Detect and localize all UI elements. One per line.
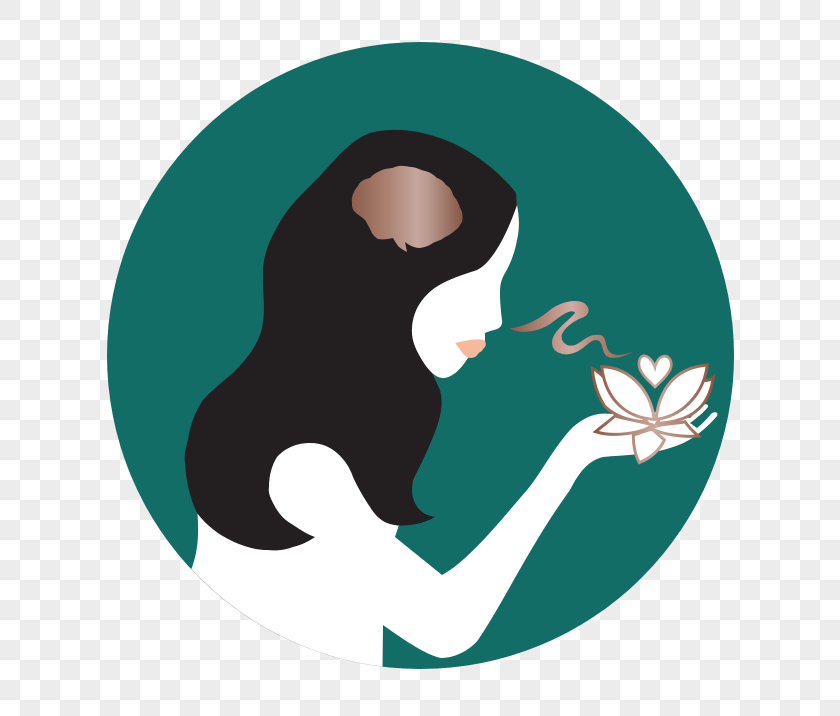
face <box>412 205 519 378</box>
back right petal <box>657 377 713 423</box>
brain <box>352 166 463 252</box>
bottom center petal <box>633 429 664 463</box>
heart <box>639 356 671 387</box>
left main petal <box>602 367 654 419</box>
arc edge <box>191 569 382 667</box>
teal circle background <box>107 42 734 669</box>
back left petal <box>592 368 647 422</box>
hair <box>185 130 517 550</box>
lotus flower with heart <box>592 356 713 463</box>
lips <box>455 339 486 358</box>
woman's body and arm <box>191 404 718 667</box>
bottom left petal <box>596 416 653 434</box>
bottom right petal <box>651 422 698 436</box>
scent swirl <box>509 301 633 358</box>
right main petal <box>656 365 707 419</box>
